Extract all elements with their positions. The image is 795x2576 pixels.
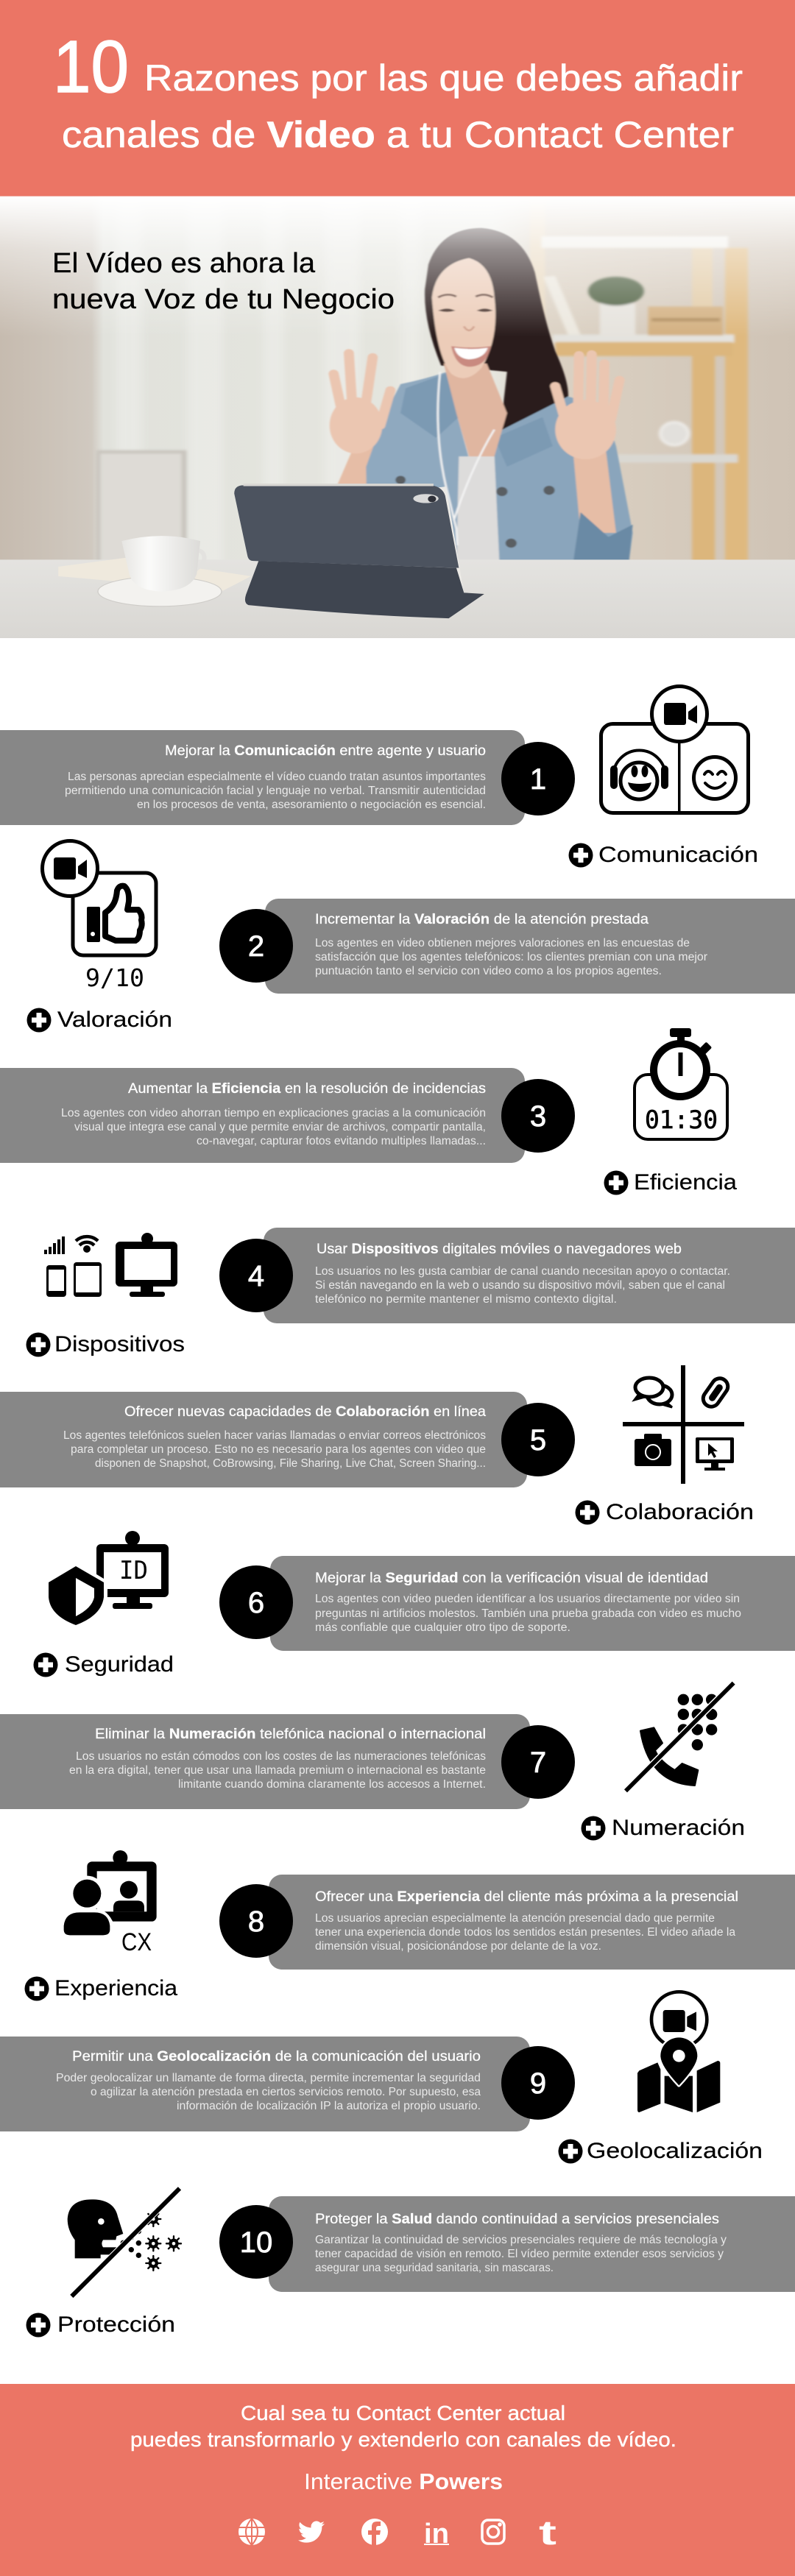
- panel: reason 10 salud: 10: [240, 2226, 272, 2259]
- label: Colaboración: Colaboración: [606, 1500, 754, 1524]
- label: Eficiencia: [604, 1170, 737, 1195]
- jacket: [366, 367, 469, 564]
- panel: reason 5 colaboración: para completar un proceso. Esto no es necesario para los agentes con video que: [71, 1443, 486, 1456]
- panel: reason 8 experiencia: Los usuarios aprecian especialmente la atención presencial dado que permite: [315, 1912, 715, 1925]
- panel: reason 5 colaboración: Los agentes telefónicos suelen hacer varias llamadas o enviar correos electrónicos: [63, 1429, 486, 1442]
- panel: reason 10 salud: Proteger la Salud dando continuidad a servicios presenciales: [315, 2211, 719, 2227]
- panel: reason 2 valoración: [219, 899, 795, 994]
- label: Valoración: [26, 1008, 172, 1032]
- panel: reason 3 eficiencia: co-navegar, capturar fotos evitando multiples llamadas...: [197, 1135, 486, 1147]
- icon: numeración phone crossed out: [626, 1683, 734, 1791]
- panel: reason 8 experiencia: [219, 1875, 795, 1970]
- title: [53, 26, 743, 155]
- label: Eficiencia: Eficiencia: [634, 1170, 737, 1195]
- panel: reason 1 comunicación: permitiendo una comunicación facial y lenguaje no verbal. Transmitir autenticidad: [65, 785, 486, 797]
- panel: reason 9 geolocalización: 9: [530, 2067, 546, 2100]
- notebook: [58, 558, 251, 591]
- panel: reason 3 eficiencia: Los agentes con video ahorran tiempo en explicaciones gracias a la comunicación: [61, 1107, 486, 1119]
- icon: facebook: [361, 2519, 388, 2545]
- panel: reason 2 valoración: Los agentes en video obtienen mejores valoraciones en las encuestas de: [315, 937, 690, 949]
- hero tagline: nueva Voz de tu Negocio: [52, 284, 395, 315]
- label: Protección: [26, 2313, 175, 2338]
- earphone cord: [438, 372, 495, 545]
- panel: reason 4 dispositivos: [219, 1228, 795, 1323]
- panel: reason 7 numeración: 7: [530, 1747, 546, 1779]
- hero photo: woman waving at tablet: [0, 197, 795, 638]
- panel: reason 5 colaboración: disponen de Snapshot, CoBrowsing, File Sharing, Live Chat, Screen Sharing...: [95, 1457, 486, 1470]
- social icons: [239, 2513, 556, 2552]
- icon: linkedin: in: [424, 2519, 449, 2550]
- closing statement: Cual sea tu Contact Center actual: [241, 2402, 565, 2424]
- icon: eficiencia stopwatch: 01:30: [645, 1105, 718, 1135]
- hands: [333, 353, 620, 430]
- icon: eficiencia stopwatch: [635, 1028, 727, 1139]
- label: Experiencia: Experiencia: [54, 1976, 177, 2000]
- icon: instagram: [482, 2520, 504, 2544]
- icon: dispositivos: [44, 1233, 177, 1297]
- panel: reason 5 colaboración: [0, 1392, 575, 1487]
- panel: reason 3 eficiencia: [0, 1068, 575, 1163]
- panel: reason 8 experiencia: tener una experiencia donde todos los sentidos están presentes. El video añade la: [315, 1926, 735, 1939]
- panel: reason 1 comunicación: Las personas aprecian especialmente el vídeo cuando tratan asuntos importantes: [68, 771, 486, 783]
- icon: valoración thumbs up: 9/10: [85, 963, 144, 992]
- panel: reason 10 salud: tener capacidad de visión en remoto. El vídeo permite extender esos servicios y: [315, 2248, 724, 2260]
- panel: reason 9 geolocalización: o agilizar la atención prestada en ciertos servicios remoto. Por supuesto, esa: [91, 2086, 481, 2098]
- panel: reason 9 geolocalización: Permitir una Geolocalización de la comunicación del usuario: [72, 2048, 481, 2064]
- panel: reason 6 seguridad: 6: [248, 1587, 264, 1619]
- title: Razones por las que debes añadir: [144, 57, 743, 99]
- panel: reason 8 experiencia: dimensión visual, posicionándose por delante de la voz.: [315, 1940, 601, 1953]
- panel: reason 5 colaboración: Ofrecer nuevas capacidades de Colaboración en línea: [124, 1404, 486, 1420]
- panel: reason 4 dispositivos: Los usuarios no les gusta cambiar de canal cuando necesitan apoyo o contactar.: [315, 1265, 730, 1278]
- closing statement: puedes transformarlo y extenderlo con canales de vídeo.: [130, 2428, 676, 2451]
- brand: Interactive Powers: [304, 2469, 503, 2494]
- panel: reason 1 comunicación: [0, 730, 575, 825]
- panel: reason 7 numeración: Eliminar la Numeración telefónica nacional o internacional: [95, 1726, 486, 1742]
- tablet: [439, 486, 463, 589]
- panel: reason 2 valoración: 2: [248, 930, 264, 963]
- label: Protección: Protección: [57, 2313, 175, 2337]
- arms: [337, 444, 381, 485]
- icon: experiencia CX video call: CX: [121, 1928, 152, 1956]
- panel: reason 3 eficiencia: Aumentar la Eficiencia en la resolución de incidencias: [128, 1080, 486, 1097]
- panel: reason 7 numeración: limitante cuando domina claramente los accesos a Internet.: [178, 1778, 486, 1791]
- footer banner: [0, 2384, 795, 2576]
- label: Seguridad: Seguridad: [65, 1652, 174, 1677]
- closing statement: [130, 2402, 676, 2451]
- label: Numeración: Numeración: [612, 1816, 745, 1840]
- panel: reason 2 valoración: Incrementar la Valoración de la atención prestada: [315, 911, 649, 927]
- panel: reason 10 salud: Garantizar la continuidad de servicios presenciales requiere de más tecnología y: [315, 2234, 727, 2246]
- label: Geolocalización: Geolocalización: [587, 2139, 763, 2163]
- panel: reason 7 numeración: [0, 1714, 575, 1809]
- icon: valoración thumbs up: [43, 841, 156, 992]
- panel: reason 6 seguridad: [219, 1556, 795, 1651]
- hair: [425, 228, 568, 450]
- panel: reason 10 salud: asegurar una seguridad sanitaria, sin mascaras.: [315, 2262, 554, 2274]
- icon: seguridad shield and ID monitor: ID: [119, 1556, 148, 1585]
- table: [0, 559, 795, 638]
- panel: reason 4 dispositivos: Usar Dispositivos digitales móviles o navegadores web: [317, 1241, 682, 1257]
- panel: reason 8 experiencia: 8: [248, 1906, 264, 1938]
- panel: reason 10 salud: [219, 2196, 795, 2292]
- panel: reason 4 dispositivos: telefónico no permite mantener el mismo contexto digital.: [315, 1293, 617, 1306]
- panel: reason 5 colaboración: 5: [530, 1424, 546, 1457]
- icon: twitter: [298, 2521, 325, 2543]
- panel: reason 2 valoración: puntuación tanto el servicio con video como a los propios agentes.: [315, 965, 662, 977]
- panel: reason 4 dispositivos: Si están navegando en la web o usando su dispositivo móvil, saben que el canal: [315, 1279, 725, 1292]
- icon: protección face with germs crossed out: [68, 2188, 181, 2296]
- label: Comunicación: Comunicación: [598, 843, 758, 867]
- label: Valoración: Valoración: [57, 1008, 172, 1032]
- panel: reason 3 eficiencia: 3: [530, 1100, 546, 1133]
- label: Dispositivos: Dispositivos: [54, 1332, 185, 1356]
- header banner: [0, 0, 795, 197]
- panel: reason 6 seguridad: Los agentes con video pueden identificar a los usuarios directamente por video sin: [315, 1593, 740, 1605]
- panel: reason 7 numeración: Los usuarios no están cómodos con los costes de las numeraciones telefónicas: [76, 1750, 486, 1763]
- icon: comunicación video faces: [601, 686, 748, 813]
- panel: reason 3 eficiencia: visual que integra ese canal y que permite enviar de archivos, compartir pantalla,: [74, 1121, 486, 1133]
- panel: reason 8 experiencia: Ofrecer una Experiencia del cliente más próxima a la presencial: [315, 1889, 738, 1905]
- panel: reason 4 dispositivos: 4: [248, 1260, 264, 1292]
- panel: reason 1 comunicación: 1: [530, 763, 546, 796]
- hero tagline: [52, 248, 395, 315]
- title: canales de Video a tu Contact Center: [62, 114, 734, 155]
- icon: globe: [239, 2519, 265, 2545]
- icon: experiencia CX video call: [60, 1850, 157, 1956]
- title: 10: [53, 26, 129, 108]
- icon: seguridad shield and ID monitor: [44, 1531, 169, 1631]
- panel: reason 6 seguridad: Mejorar la Seguridad con la verificación visual de identidad: [315, 1570, 708, 1586]
- icon: colaboración quadrants: [623, 1365, 744, 1484]
- panel: reason 9 geolocalización: Poder geolocalizar un llamante de forma directa, permite incrementar la seguridad: [56, 2072, 481, 2084]
- shirt and neck: [456, 456, 499, 564]
- panel: reason 1 comunicación: en los procesos de venta, asesoramiento o negociación es esencial.: [137, 799, 486, 811]
- panel: reason 9 geolocalización: [0, 2037, 575, 2131]
- panel: reason 7 numeración: en la era digital, tener que usar una llamada premium o internacional es bastante: [69, 1764, 486, 1777]
- panel: reason 2 valoración: satisfacción que los agentes telefónicos: los clientes premian con una mejor: [315, 951, 707, 963]
- hero tagline: El Vídeo es ahora la: [52, 248, 316, 279]
- face: [432, 258, 495, 378]
- icon: geolocalización map pin with camera: [637, 1992, 720, 2112]
- saucer and cup: [98, 576, 222, 606]
- icon: tumblr: t: [539, 2513, 556, 2552]
- panel: reason 6 seguridad: preguntas ni artificios molestos. También una prueba grabada con video es mucho: [315, 1607, 741, 1620]
- panel: reason 1 comunicación: Mejorar la Comunicación entre agente y usuario: [165, 743, 486, 759]
- panel: reason 9 geolocalización: información de localización IP la autoriza el propio usuario.: [177, 2100, 481, 2112]
- panel: reason 6 seguridad: más confiable que cualquier otro tipo de soporte.: [315, 1621, 570, 1634]
